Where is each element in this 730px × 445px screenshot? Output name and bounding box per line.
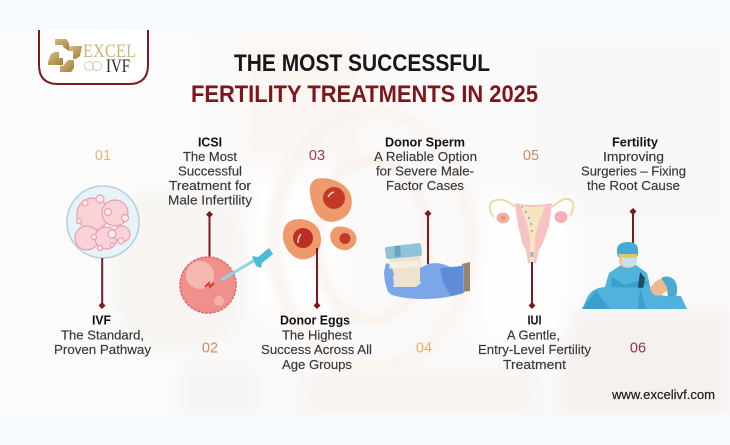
number 05: 05 bbox=[523, 148, 539, 164]
label: Fertility: Improving bbox=[603, 150, 664, 164]
label: IUI: Entry-Level Fertility bbox=[478, 343, 592, 357]
label: Donor Eggs: Donor Eggs bbox=[280, 314, 350, 328]
label: ICSI: Male Infertility bbox=[168, 194, 253, 208]
label: IUI: IUI bbox=[528, 314, 542, 328]
step 01: IVF bbox=[54, 148, 152, 357]
label: ICSI: The Most bbox=[183, 150, 238, 164]
icon: logo cross mark bbox=[48, 39, 82, 72]
icon: gloved hand holding cup bbox=[384, 243, 470, 299]
label: ICSI: Treatment for bbox=[169, 179, 251, 193]
label: Donor Sperm: A Reliable Option bbox=[374, 150, 477, 164]
step 06: Fertility surgeries bbox=[581, 136, 687, 309]
connector line bbox=[424, 210, 432, 264]
title: THE MOST SUCCESSFUL bbox=[234, 50, 490, 77]
step 04: Donor Sperm bbox=[374, 136, 477, 299]
label: Fertility: Fertility bbox=[612, 136, 658, 150]
logo badge bbox=[39, 30, 148, 84]
step 02: ICSI bbox=[168, 136, 273, 313]
label: ICSI bbox=[168, 136, 253, 208]
logo text: IVF bbox=[106, 56, 130, 77]
label: Donor Eggs: The Highest bbox=[282, 328, 353, 342]
number 06: 06 bbox=[630, 340, 646, 356]
number 03: 03 bbox=[309, 148, 325, 164]
label: Fertility bbox=[581, 136, 686, 193]
number 04: 04 bbox=[416, 340, 432, 356]
label: Fertility: the Root Cause bbox=[587, 179, 680, 193]
label: ICSI: ICSI bbox=[198, 136, 222, 150]
website: www.excelivf.com bbox=[611, 388, 715, 402]
step 05: IUI bbox=[478, 148, 592, 372]
title: FERTILITY TREATMENTS IN 2025 bbox=[191, 81, 538, 108]
label: IVF: Proven Pathway bbox=[54, 343, 152, 357]
icon: uterus diagram bbox=[490, 199, 573, 263]
label: Donor Sperm: for Severe Male- bbox=[376, 164, 474, 178]
number 01: 01 bbox=[95, 148, 111, 164]
title bbox=[191, 50, 538, 108]
label: Donor Sperm: Donor Sperm bbox=[385, 136, 465, 150]
label: IUI bbox=[478, 314, 592, 372]
label: Donor Sperm: Factor Cases bbox=[386, 179, 464, 193]
connector line bbox=[98, 258, 106, 309]
icon: donor eggs bbox=[283, 178, 356, 259]
label: IUI: A Gentle, bbox=[507, 328, 560, 342]
label: IVF: IVF bbox=[92, 314, 111, 328]
label: Donor Eggs bbox=[261, 314, 372, 372]
connector line bbox=[528, 262, 536, 309]
label: IUI: Treatment bbox=[503, 358, 567, 372]
step 03: Donor Eggs bbox=[261, 148, 372, 372]
logo text: EXCEL bbox=[83, 41, 136, 62]
page background bbox=[118, 40, 730, 415]
label: IVF: The Standard, bbox=[61, 328, 144, 342]
icon: surgeon and patient bbox=[582, 242, 687, 309]
label: ICSI: Successful bbox=[178, 164, 242, 178]
label: Fertility: Surgeries – Fixing bbox=[581, 164, 686, 178]
label: Donor Eggs: Age Groups bbox=[282, 358, 352, 372]
number 02: 02 bbox=[202, 340, 218, 356]
label: IVF bbox=[54, 314, 152, 357]
connector line bbox=[630, 208, 636, 243]
logo text bbox=[83, 41, 136, 77]
icon: ICSI egg and pipette bbox=[180, 248, 273, 313]
label: Donor Eggs: Success Across All bbox=[261, 343, 372, 357]
connector line bbox=[314, 248, 320, 309]
connector line bbox=[206, 211, 213, 257]
label: Donor Sperm bbox=[374, 136, 477, 193]
icon: embryo cells bbox=[67, 186, 139, 258]
